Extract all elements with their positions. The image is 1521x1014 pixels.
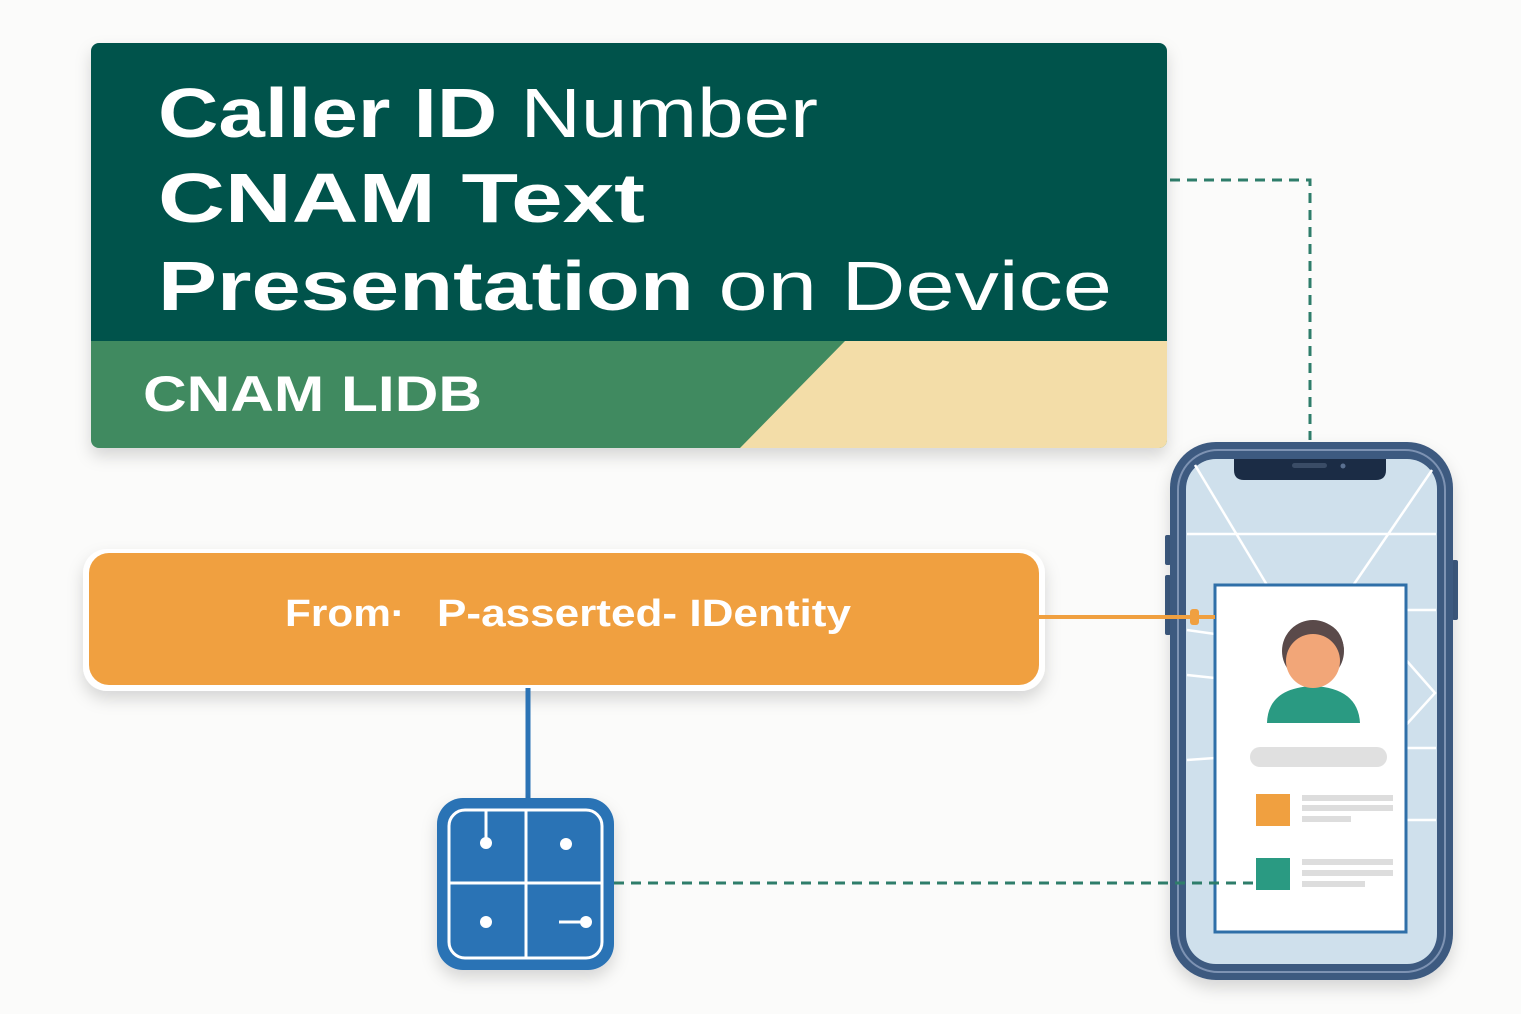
connector: orange to phone	[1039, 609, 1215, 625]
title: Caller ID Number	[158, 74, 818, 152]
title: CNAM Text	[158, 159, 645, 237]
phone	[1165, 442, 1458, 980]
connector: blue line	[526, 688, 530, 800]
connector: dashed header to phone	[1170, 180, 1310, 440]
title	[158, 74, 1112, 325]
orange header bar	[83, 549, 1045, 691]
orange header bar: From·	[285, 593, 405, 635]
icon: switch device	[437, 798, 614, 970]
card: caller profile	[1215, 585, 1406, 932]
orange header bar: P-asserted- IDentity	[437, 593, 851, 635]
subtitle: CNAM LIDB	[143, 366, 482, 422]
connector: dashed device to phone	[614, 882, 1258, 884]
title: Presentation on Device	[158, 247, 1112, 325]
header panel	[91, 43, 1167, 448]
